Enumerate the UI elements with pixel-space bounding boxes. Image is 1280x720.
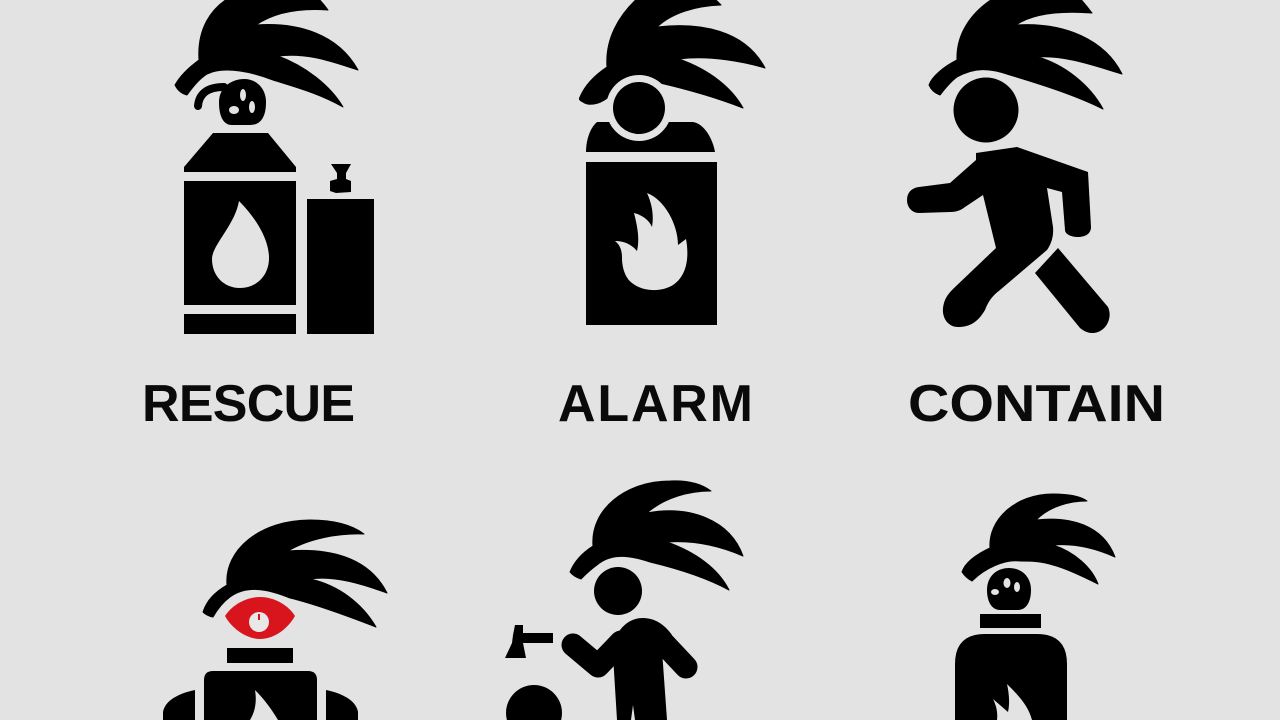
panel: alarm	[558, 0, 765, 433]
panel: eye icon	[163, 520, 387, 720]
icon: person with hair, axe and ball	[505, 481, 743, 720]
panel: contain	[907, 0, 1165, 433]
panel: extinguisher	[955, 494, 1115, 720]
icon: running person with hair	[907, 0, 1122, 333]
panel: rescue	[142, 0, 374, 433]
icon: alarm extinguisher with flame	[579, 0, 765, 325]
label: contain: CONTAIN	[908, 375, 1165, 433]
label: rescue: RESCUE	[142, 375, 355, 433]
icon: extinguisher with hair	[955, 494, 1115, 720]
icon: rescue extinguisher with hair	[175, 0, 374, 334]
panel: axe figure	[505, 481, 743, 720]
icon: hair with red eye and body	[163, 520, 387, 720]
label: alarm: ALARM	[558, 375, 753, 433]
